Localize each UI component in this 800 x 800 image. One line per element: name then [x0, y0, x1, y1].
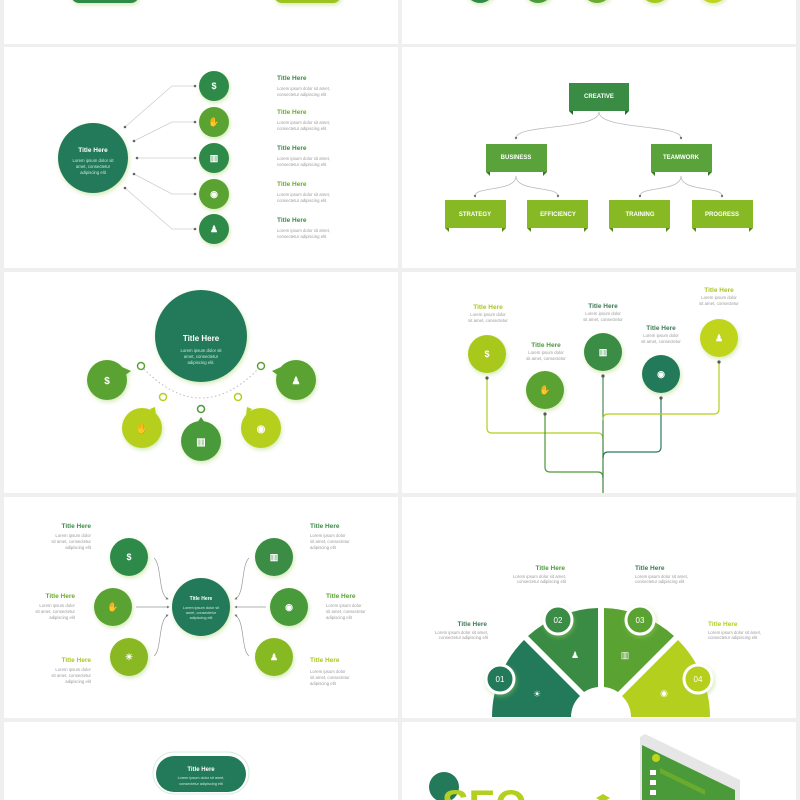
- panel: tree timeline: $: [484, 349, 490, 359]
- panel: six inputs to hub: ◉: [285, 602, 293, 612]
- box: teamwork: [651, 144, 712, 176]
- item text: consectetur adipiscing elit: [277, 92, 327, 97]
- panel: pill title bottom-left: consectetur adipiscing elit: [179, 782, 224, 786]
- panel: six inputs to hub: ▥: [270, 552, 278, 562]
- hub circle: [58, 123, 128, 193]
- panel: tree timeline: Lorem ipsum dolor: [585, 311, 621, 316]
- panel: six inputs to hub: Lorem ipsum dolor: [310, 669, 346, 674]
- item text: consectetur adipiscing elit: [277, 234, 327, 239]
- panel: tree timeline: Title Here: [531, 342, 561, 349]
- panel: six inputs to hub: sit amet, consectetur: [310, 675, 350, 680]
- panel: tree timeline: sit amet, consectetur: [583, 317, 623, 322]
- panel: six inputs to hub: adipiscing elit: [310, 545, 337, 550]
- panel: six inputs to hub: sit amet, consectetur: [51, 539, 92, 544]
- panel: tree timeline: Title Here: [704, 287, 734, 294]
- panel: six inputs to hub: ✋: [107, 601, 119, 612]
- box: strategy: [445, 200, 506, 232]
- panel: six inputs to hub: Lorem ipsum dolor: [310, 533, 346, 538]
- panel: org chart: [445, 83, 753, 232]
- item text: Lorem ipsum dolor sit amet,: [277, 192, 330, 197]
- panel: arc of speech bubbles: ✋: [136, 422, 148, 435]
- central circle: Lorem ipsum dolor sit: [180, 348, 222, 353]
- panel: semicircle segments: ▥: [621, 650, 629, 660]
- panel: six inputs to hub: sit amet, consectetur: [35, 609, 76, 614]
- panel: arc of speech bubbles: [87, 290, 316, 461]
- panel: six inputs to hub: adipiscing elit: [49, 615, 76, 620]
- panel: six inputs to hub: Title Here: [61, 523, 91, 530]
- panel: semicircle segments: Lorem ipsum dolor sit amet,: [513, 574, 566, 579]
- panel: semicircle segments: ◉: [660, 688, 668, 698]
- panel: hub with five items: $: [211, 81, 217, 91]
- segments: [492, 608, 710, 717]
- item text: [277, 75, 330, 239]
- panel: tree timeline: Lorem ipsum dolor: [528, 350, 564, 355]
- item text: consectetur adipiscing elit: [277, 198, 327, 203]
- panel: six inputs to hub: adipiscing elit: [326, 615, 353, 620]
- box: efficiency: EFFICIENCY: [540, 212, 576, 218]
- panel: arc of speech bubbles: ◉: [257, 424, 266, 435]
- item text: consectetur adipiscing elit: [277, 126, 327, 131]
- panel: arc of speech bubbles: ▥: [196, 437, 206, 448]
- panel: semicircle segments: Title Here: [535, 565, 565, 572]
- box: training: [609, 200, 670, 232]
- hub circle: adipiscing elit: [80, 170, 107, 175]
- box: progress: PROGRESS: [705, 212, 739, 218]
- panel: semicircle segments: 02: [554, 616, 563, 625]
- panel: tree timeline: ♟: [715, 333, 723, 343]
- box: creative: [569, 83, 629, 115]
- panel: six inputs to hub: ♟: [270, 652, 278, 662]
- panel: six inputs to hub: Lorem ipsum dolor: [39, 603, 76, 608]
- hub circle: Title Here: [78, 147, 108, 154]
- panel: tree timeline: Lorem ipsum dolor: [470, 312, 506, 317]
- panel: semicircle segments: Lorem ipsum dolor sit amet,: [708, 630, 761, 635]
- panel: tree timeline: ◉: [657, 369, 665, 379]
- panel: tree timeline: sit amet, consectetur: [641, 339, 681, 344]
- item text: Title Here: [277, 75, 307, 82]
- box: creative: CREATIVE: [584, 94, 614, 100]
- panel: six inputs to hub: Lorem ipsum dolor sit: [183, 606, 220, 610]
- panel: hub with five items: ♟: [210, 224, 218, 234]
- bubbles: [87, 360, 316, 461]
- hub circle: amet, consectetur: [76, 164, 111, 169]
- panel: six inputs to hub: Title Here: [310, 657, 340, 664]
- panel: six inputs to hub: Lorem ipsum dolor: [326, 603, 362, 608]
- panel: semicircle segments: ☀: [533, 689, 541, 699]
- panel: six inputs to hub: $: [126, 552, 132, 562]
- panel: six inputs to hub: Title Here: [326, 593, 356, 600]
- panel: six inputs to hub: Title Here: [45, 593, 75, 600]
- panel: semicircle segments: ♟: [571, 650, 579, 660]
- panel: tree timeline: sit amet, consectetur: [526, 356, 566, 361]
- panel: semicircle segments: Lorem ipsum dolor sit amet,: [435, 630, 488, 635]
- panel: pill title bottom-left: [153, 752, 249, 794]
- panel: semicircle segments: consectetur adipiscing elit: [708, 635, 758, 640]
- panel: six inputs to hub: sit amet, consectetur: [51, 673, 92, 678]
- panel: hub with five items: ◉: [210, 189, 218, 199]
- panel: arc of speech bubbles: ♟: [292, 376, 300, 387]
- panel: tree timeline: ▥: [599, 347, 607, 357]
- panel: semicircle segments: Title Here: [635, 565, 665, 572]
- panel: semicircle segments: Lorem ipsum dolor sit amet,: [635, 574, 688, 579]
- panel: pill title bottom-left: Title Here: [187, 767, 215, 773]
- panel: tree timeline: Lorem ipsum dolor: [701, 295, 737, 300]
- item text: Lorem ipsum dolor sit amet,: [277, 120, 330, 125]
- panel: tree timeline: [468, 287, 739, 493]
- panel: six inputs to hub: Title Here: [310, 523, 340, 530]
- panel: six inputs to hub: adipiscing elit: [65, 545, 92, 550]
- item text: Title Here: [277, 145, 307, 152]
- central circle: [155, 290, 247, 382]
- item text: Lorem ipsum dolor sit amet,: [277, 228, 330, 233]
- panel: semicircle segments: consectetur adipiscing elit: [439, 635, 489, 640]
- item text: Title Here: [277, 217, 307, 224]
- panel: semicircle segments: 04: [694, 675, 703, 684]
- panel: top-left partial pills: [71, 0, 341, 3]
- box: strategy: STRATEGY: [459, 212, 491, 218]
- panel: semicircle segments: Title Here: [708, 621, 738, 628]
- panel: semicircle segments: 01: [496, 675, 505, 684]
- item circles with icons: [199, 71, 229, 244]
- panel: tree timeline: ✋: [539, 384, 551, 395]
- box: training: TRAINING: [626, 212, 655, 218]
- panel: pill title bottom-left: Lorem ipsum dolor sit amet,: [178, 776, 224, 780]
- central circle: adipiscing elit.: [188, 360, 214, 365]
- panel: six inputs to hub: [35, 523, 366, 686]
- panel: six inputs to hub: adipiscing elit: [65, 679, 92, 684]
- panel: tree timeline: Title Here: [588, 303, 618, 310]
- panel: SEO illustration: [429, 734, 740, 800]
- panel: hub with five items: ▥: [210, 153, 218, 163]
- panel: tree timeline: sit amet, consectetur: [468, 318, 508, 323]
- box: progress: [692, 200, 753, 232]
- box: teamwork: TEAMWORK: [663, 155, 700, 161]
- panel: six inputs to hub: Title Here: [61, 657, 91, 664]
- panel: six inputs to hub: ☀: [125, 652, 133, 662]
- item text: Lorem ipsum dolor sit amet,: [277, 156, 330, 161]
- item text: Title Here: [277, 109, 307, 116]
- panel: six inputs to hub: sit amet, consectetur: [326, 609, 366, 614]
- panel: six inputs to hub: amet, consectetur: [186, 611, 217, 615]
- panel: arc of speech bubbles: $: [104, 376, 110, 387]
- panel: six inputs to hub: Title Here: [190, 596, 213, 602]
- panel: six inputs to hub: Lorem ipsum dolor: [55, 667, 92, 672]
- panel: hub with five items: ✋: [208, 116, 220, 127]
- panel: tree timeline: Title Here: [473, 304, 503, 311]
- box: business: [486, 144, 547, 176]
- panel: six inputs to hub: Lorem ipsum dolor: [55, 533, 92, 538]
- panel: six inputs to hub: adipiscing elit: [190, 616, 213, 620]
- box: efficiency: [527, 200, 588, 232]
- item text: Lorem ipsum dolor sit amet,: [277, 86, 330, 91]
- item text: consectetur adipiscing elit: [277, 162, 327, 167]
- panel: six inputs to hub: sit amet, consectetur: [310, 539, 350, 544]
- panel: top-right partial circles: [465, 0, 728, 3]
- panel: semicircle segments: consectetur adipiscing elit: [517, 579, 567, 584]
- panel: tree timeline: Lorem ipsum dolor: [643, 333, 679, 338]
- central circle: amet, consectetur: [184, 354, 219, 359]
- item text: Title Here: [277, 181, 307, 188]
- hub circle: Lorem ipsum dolor sit: [72, 158, 114, 163]
- panel: semicircle segments: Title Here: [457, 621, 487, 628]
- panel: semicircle segments: 03: [636, 616, 645, 625]
- box: business: BUSINESS: [501, 155, 531, 161]
- panel: tree timeline: Title Here: [646, 325, 676, 332]
- panel: tree timeline: sit amet, consectetur: [699, 301, 739, 306]
- panel: semicircle segments: [435, 565, 761, 717]
- panel: six inputs to hub: adipiscing elit: [310, 681, 337, 686]
- central circle: Title Here: [183, 334, 220, 343]
- panel: semicircle segments: consectetur adipiscing elit: [635, 579, 685, 584]
- panel: hub with five items: [58, 71, 330, 244]
